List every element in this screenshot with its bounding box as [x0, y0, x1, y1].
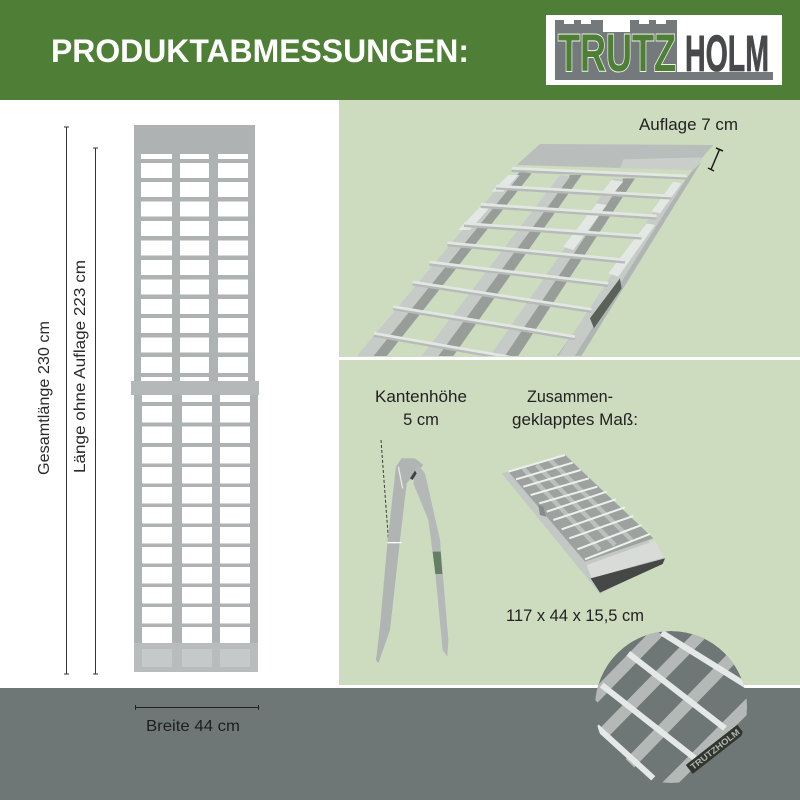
grating label [686, 725, 744, 774]
title: PRODUKTABMESSUNGEN: [51, 33, 469, 69]
dimension line: length without support [93, 148, 98, 674]
base plate [134, 643, 258, 672]
panel: top right background [339, 100, 800, 357]
label: edge height: Kantenhöhe [375, 388, 467, 406]
long rails [593, 632, 753, 788]
detail lens: grating close-up [593, 631, 753, 788]
cross bars [597, 633, 748, 778]
cross bars shadow [374, 170, 687, 359]
dimension line: total length [64, 127, 69, 674]
photo: full ramp top view [131, 125, 259, 672]
label: support: Auflage 7 cm [639, 116, 738, 134]
side rail [555, 162, 702, 358]
end plate [587, 541, 664, 578]
cross bars highlight [374, 168, 687, 358]
logo: Trutzholm: TRUTZ [558, 24, 676, 83]
label: folded size heading: Zusammen- [527, 388, 613, 406]
grating label: TRUTZHOLM [688, 727, 742, 772]
label: folded size: 117 x 44 x 15,5 cm [506, 607, 644, 625]
long rails [523, 460, 632, 550]
dimension line: width [136, 705, 258, 710]
upper ramp openings [141, 154, 248, 381]
label: width: Breite 44 cm [146, 718, 240, 735]
label: edge height: 5 cm [403, 411, 439, 429]
cross bars [508, 455, 650, 559]
bright highlights on beams [458, 175, 682, 277]
photo: ramp perspective with support plate [355, 144, 713, 359]
label: total length: Gesamtlänge 230 cm [36, 321, 53, 475]
footer band [0, 688, 800, 800]
photo: folded ramp [502, 454, 665, 594]
header band [0, 0, 800, 100]
longitudinal beams top [355, 175, 683, 358]
panel: bottom right background [339, 360, 800, 685]
photo: folded ramp side view [376, 458, 448, 663]
longitudinal rails [172, 153, 220, 643]
hinge bar [131, 381, 259, 395]
icon: support height marker [708, 148, 723, 171]
label: length without support: Länge ohne Auflage 223 cm [72, 260, 89, 473]
logo: Trutzholm [546, 15, 782, 85]
longitudinal beams shadow [360, 172, 635, 358]
label: folded size heading: geklapptes Maß: [512, 411, 638, 429]
dotted leader line [381, 440, 388, 541]
support plate [517, 144, 713, 170]
lower ramp openings [142, 395, 250, 643]
rail label [590, 278, 622, 328]
